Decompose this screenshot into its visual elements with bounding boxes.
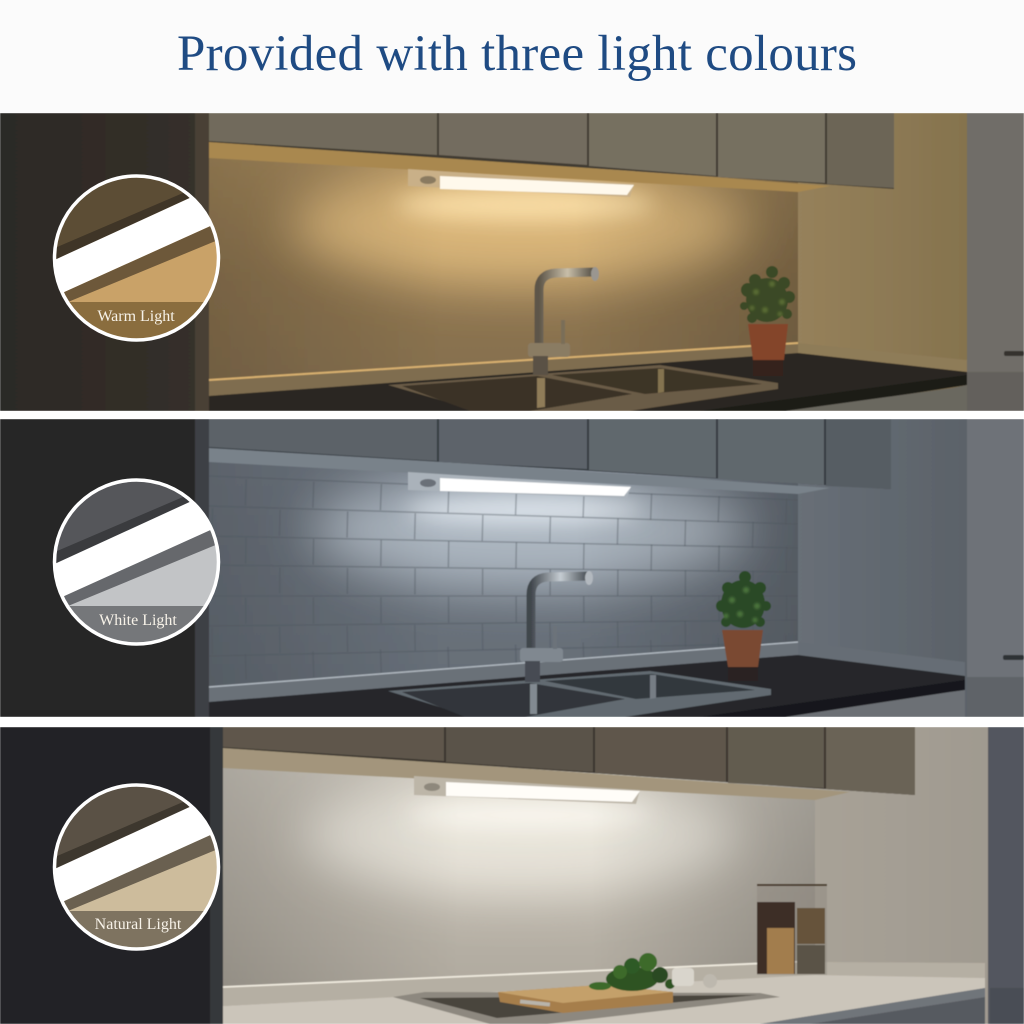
- cool glow: [310, 470, 750, 590]
- right wall upstand: [798, 642, 965, 677]
- wall edge shading: [208, 158, 798, 379]
- dark underside: [50, 172, 225, 275]
- upstand light line: [223, 961, 815, 987]
- bright light strip: [50, 500, 215, 598]
- door frame strip: [195, 113, 210, 411]
- label band: [50, 606, 225, 651]
- lower cabinet front: [785, 690, 965, 717]
- shadow line: [50, 190, 200, 262]
- back wall: [208, 462, 799, 702]
- cup and garlic: [672, 968, 717, 988]
- inset: warm light: [50, 170, 225, 347]
- shadow line: [50, 494, 200, 566]
- door frame strip: [195, 419, 210, 717]
- upstand light line: [209, 642, 798, 687]
- worktop front: [700, 680, 965, 717]
- left dark wall: [0, 727, 210, 1024]
- header band: [0, 0, 1024, 113]
- wall tone: [50, 170, 225, 345]
- dark worktop: [209, 353, 967, 411]
- backsplash upstand: [209, 343, 798, 396]
- wall edge shading: [223, 727, 816, 1024]
- cabinet lower door: [967, 372, 1024, 411]
- right side wall: [815, 727, 989, 1024]
- cool hotspot under bar: [405, 496, 645, 524]
- label band: [50, 302, 225, 347]
- upper cabinets: [223, 727, 915, 795]
- right side wall: [798, 113, 968, 411]
- wall tone: [50, 779, 225, 954]
- lower cabinet front: [810, 997, 985, 1024]
- herbs: [589, 953, 675, 991]
- cutting board: [498, 985, 673, 1013]
- ring: [54, 176, 218, 340]
- upper cabinets: [209, 419, 891, 489]
- left dark wall: [0, 113, 196, 411]
- wall edge shading: [208, 462, 798, 686]
- panel: natural light: [0, 727, 1024, 1024]
- right tall cabinet: [966, 113, 1024, 373]
- dark worktop: [209, 655, 965, 717]
- panel: white light: [0, 419, 1024, 717]
- subway tile joints: [292, 480, 756, 664]
- lower lip: [60, 528, 218, 606]
- dark underside: [50, 476, 225, 579]
- dark underside: [50, 781, 225, 884]
- faucet: [520, 571, 593, 682]
- upstand light line: [209, 343, 798, 380]
- backsplash upstand: [223, 962, 985, 1006]
- label: Warm Light: [97, 308, 175, 325]
- LED light bar: [408, 472, 631, 498]
- under-cabinet lit edge: [209, 140, 830, 192]
- sink: [388, 671, 771, 717]
- ring: [54, 480, 218, 644]
- back wall: [223, 727, 816, 1024]
- LED light bar: [408, 169, 634, 197]
- cabinet handle: [1003, 655, 1024, 660]
- warm hotspot under bar: [395, 189, 655, 221]
- cabinet handle: [1004, 351, 1024, 356]
- inset: white light: [50, 474, 225, 651]
- title: Provided with three light colours: [177, 26, 857, 82]
- storage jars: [757, 884, 827, 975]
- shadow line: [50, 799, 200, 871]
- cabinet lower door: [990, 988, 1024, 1024]
- panel: warm light: [0, 113, 1024, 411]
- warm glow: [290, 163, 750, 287]
- under-cabinet lit edge: [209, 446, 830, 494]
- sink: [393, 992, 780, 1024]
- lower lip: [60, 833, 218, 911]
- light worktop: [223, 975, 985, 1024]
- sink: [388, 365, 778, 411]
- label: White Light: [99, 612, 177, 629]
- lower lip: [60, 224, 218, 302]
- cabinet lower door: [967, 677, 1024, 717]
- bright light strip: [50, 805, 215, 903]
- right wall upstand: [931, 357, 966, 372]
- inset: natural light: [50, 779, 225, 956]
- wall tone: [50, 474, 225, 649]
- worktop speckle: [700, 375, 967, 411]
- upper cabinets: [209, 113, 894, 189]
- bright light strip: [50, 196, 215, 294]
- right tall cabinet: [968, 419, 1024, 678]
- ring: [54, 785, 218, 949]
- backsplash upstand: [209, 642, 798, 702]
- left dark wall: [0, 419, 196, 717]
- label: Natural Light: [95, 916, 182, 933]
- LED light bar: [414, 776, 640, 804]
- potted plant: [716, 571, 771, 681]
- door frame strip: [210, 727, 224, 1024]
- back wall: [208, 157, 799, 396]
- right tall cabinet: [988, 727, 1024, 1024]
- faucet: [528, 267, 599, 375]
- under-cabinet lit edge: [223, 747, 850, 800]
- potted plant: [740, 266, 795, 376]
- worktop front edge: [760, 988, 985, 1024]
- lower cabinet front: [785, 385, 967, 411]
- right side wall: [798, 419, 968, 717]
- label band: [50, 911, 225, 956]
- neutral glow: [300, 775, 740, 895]
- neutral hotspot under bar: [405, 801, 655, 829]
